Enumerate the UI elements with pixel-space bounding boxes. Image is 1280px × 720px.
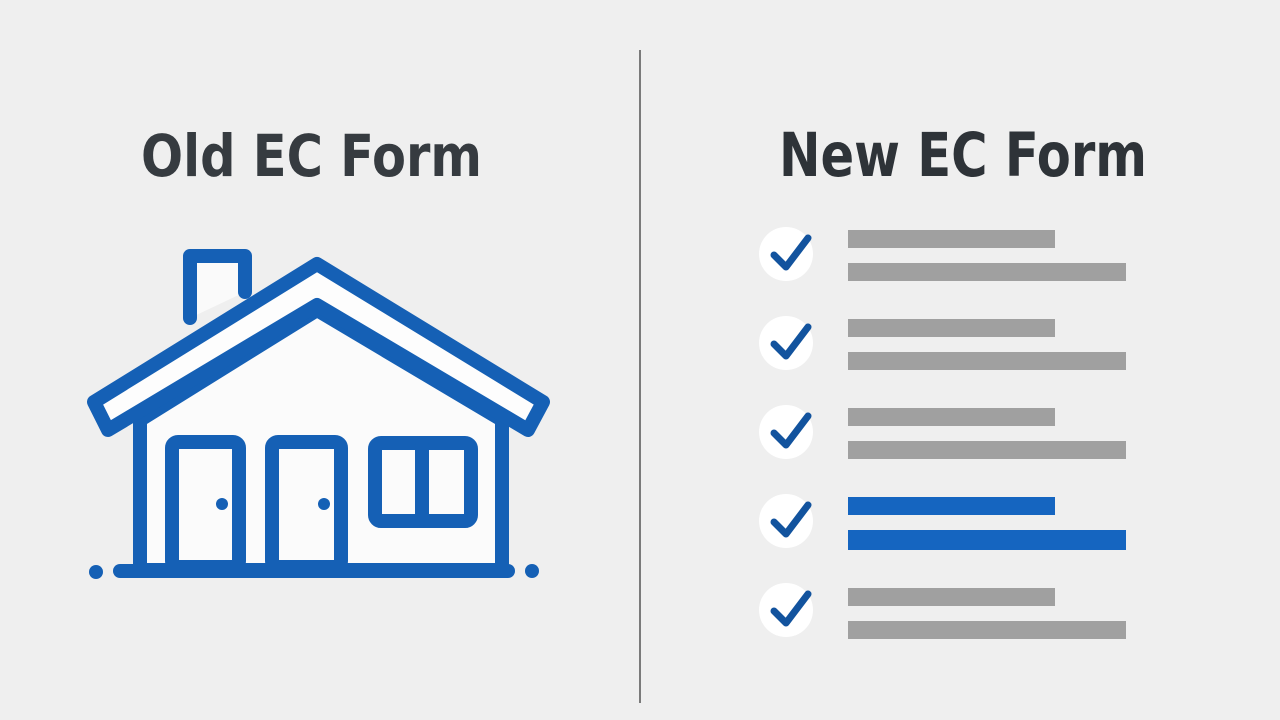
- roof: [94, 264, 543, 430]
- item 1: [759, 227, 1126, 281]
- item 2: [759, 316, 1126, 370]
- door right: [272, 442, 341, 567]
- item 4 highlighted: [759, 494, 1126, 550]
- item 5: [759, 583, 1126, 639]
- title: new EC form: New EC Form: [779, 120, 1147, 191]
- divider: [639, 50, 641, 703]
- ground line: [120, 564, 508, 578]
- door left: [172, 442, 239, 567]
- title: old EC form: Old EC Form: [141, 122, 482, 190]
- window: [375, 443, 471, 521]
- checklist: [759, 227, 1126, 639]
- item 3: [759, 405, 1126, 459]
- icon: house: [94, 256, 543, 571]
- chimney: [190, 256, 245, 318]
- walls: [140, 310, 502, 570]
